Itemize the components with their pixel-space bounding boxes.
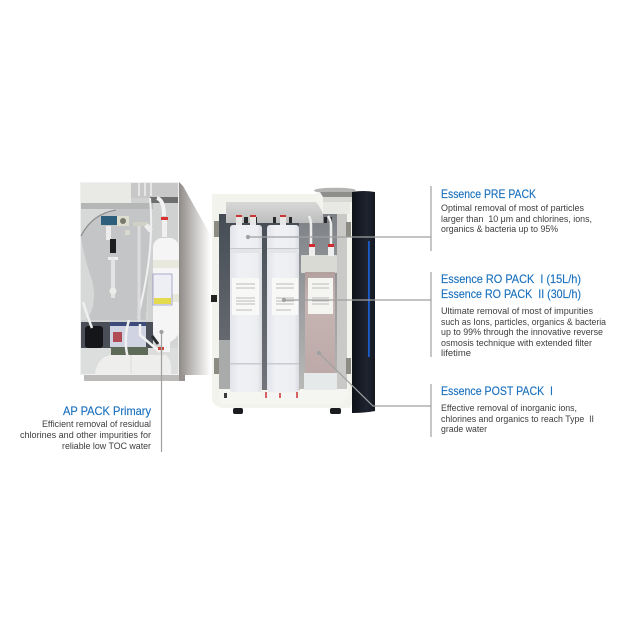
text: Essence PRE PACK [441,187,592,234]
text: AP PACK Primary: Efficient removal of residual [42,419,151,429]
top funnel [314,188,356,214]
inner dark cavity [219,214,344,390]
filter cartridge [152,238,179,352]
tubing [138,198,151,318]
black side panel [352,191,375,413]
top housing [226,202,323,223]
hinges [211,221,351,374]
cartridge: PRE pack [230,215,262,392]
text: Essence RO PACK: up to 99% through the innovative reverse [441,327,603,337]
blue indicator line [368,241,370,357]
text: Essence RO PACK: Ultimate removal of most of impurities [441,306,594,316]
text: AP PACK Primary: reliable low TOC water [62,441,151,451]
text: Essence POST PACK: Essence POST PACK I [441,384,553,398]
text: Essence PRE PACK: Essence PRE PACK [441,187,536,201]
text: Essence POST PACK: grade water [441,424,487,434]
panel: AP pack detail photo [80,182,211,381]
leader: RO pack [282,272,431,357]
text: Essence RO PACK [441,272,606,358]
text: AP PACK Primary [20,404,151,451]
text: Essence RO PACK: Essence RO PACK II (30L/h) [441,287,581,301]
text: Essence POST PACK: chlorines and organics to reach Type II [441,414,594,424]
feet [233,408,341,414]
text: Essence RO PACK: such as Ions, particles, organics & bacteria [441,317,606,327]
detail box interior [80,182,179,375]
text: Essence RO PACK: lifetime [441,348,471,358]
text: Essence PRE PACK: organics & bacteria up to 95% [441,224,558,234]
solenoid valve [101,216,130,298]
text: Essence RO PACK: osmosis technique with extended filter [441,338,592,348]
text: Essence POST PACK: Effective removal of inorganic ions, [441,403,577,413]
base tray [219,389,348,404]
text: AP PACK Primary: chlorines and other impurities for [20,430,151,440]
panel: water purifier main unit [211,188,375,414]
text: AP PACK Primary: AP PACK Primary [63,404,151,418]
cartridge: POST pack [301,216,337,390]
cartridge: RO pack [264,215,299,398]
text: Essence PRE PACK: larger than 10 μm and chlorines, ions, [441,214,592,224]
leader: PRE pack [246,186,431,251]
leader: AP pack [160,330,163,452]
unit white body [212,194,352,408]
shadow of detail box [84,182,211,381]
text: Essence POST PACK [441,384,594,434]
leader: POST pack [318,352,431,437]
text: Essence RO PACK: Essence RO PACK I (15L/h) [441,272,581,286]
text: Essence PRE PACK: Optimal removal of most of particles [441,203,584,213]
